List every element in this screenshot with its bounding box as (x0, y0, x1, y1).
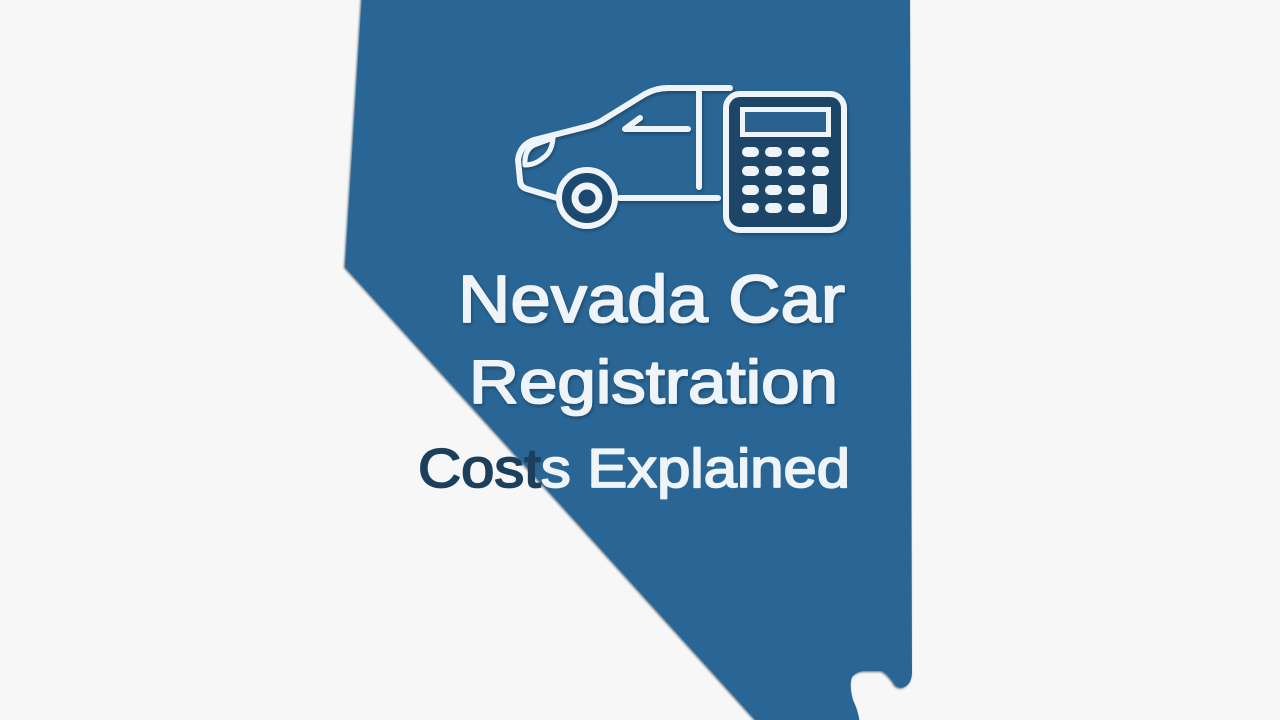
title line 2: Registration (469, 348, 838, 416)
icon: car outline (518, 88, 730, 226)
icon: calculator (726, 94, 844, 230)
icon: car with calculator (518, 88, 844, 230)
title line 3: Costs Explained (418, 437, 850, 499)
state shape: Nevada (345, 0, 912, 720)
icon: wheel (559, 170, 615, 226)
title line 1: Nevada Car (458, 262, 845, 337)
title (418, 262, 850, 499)
